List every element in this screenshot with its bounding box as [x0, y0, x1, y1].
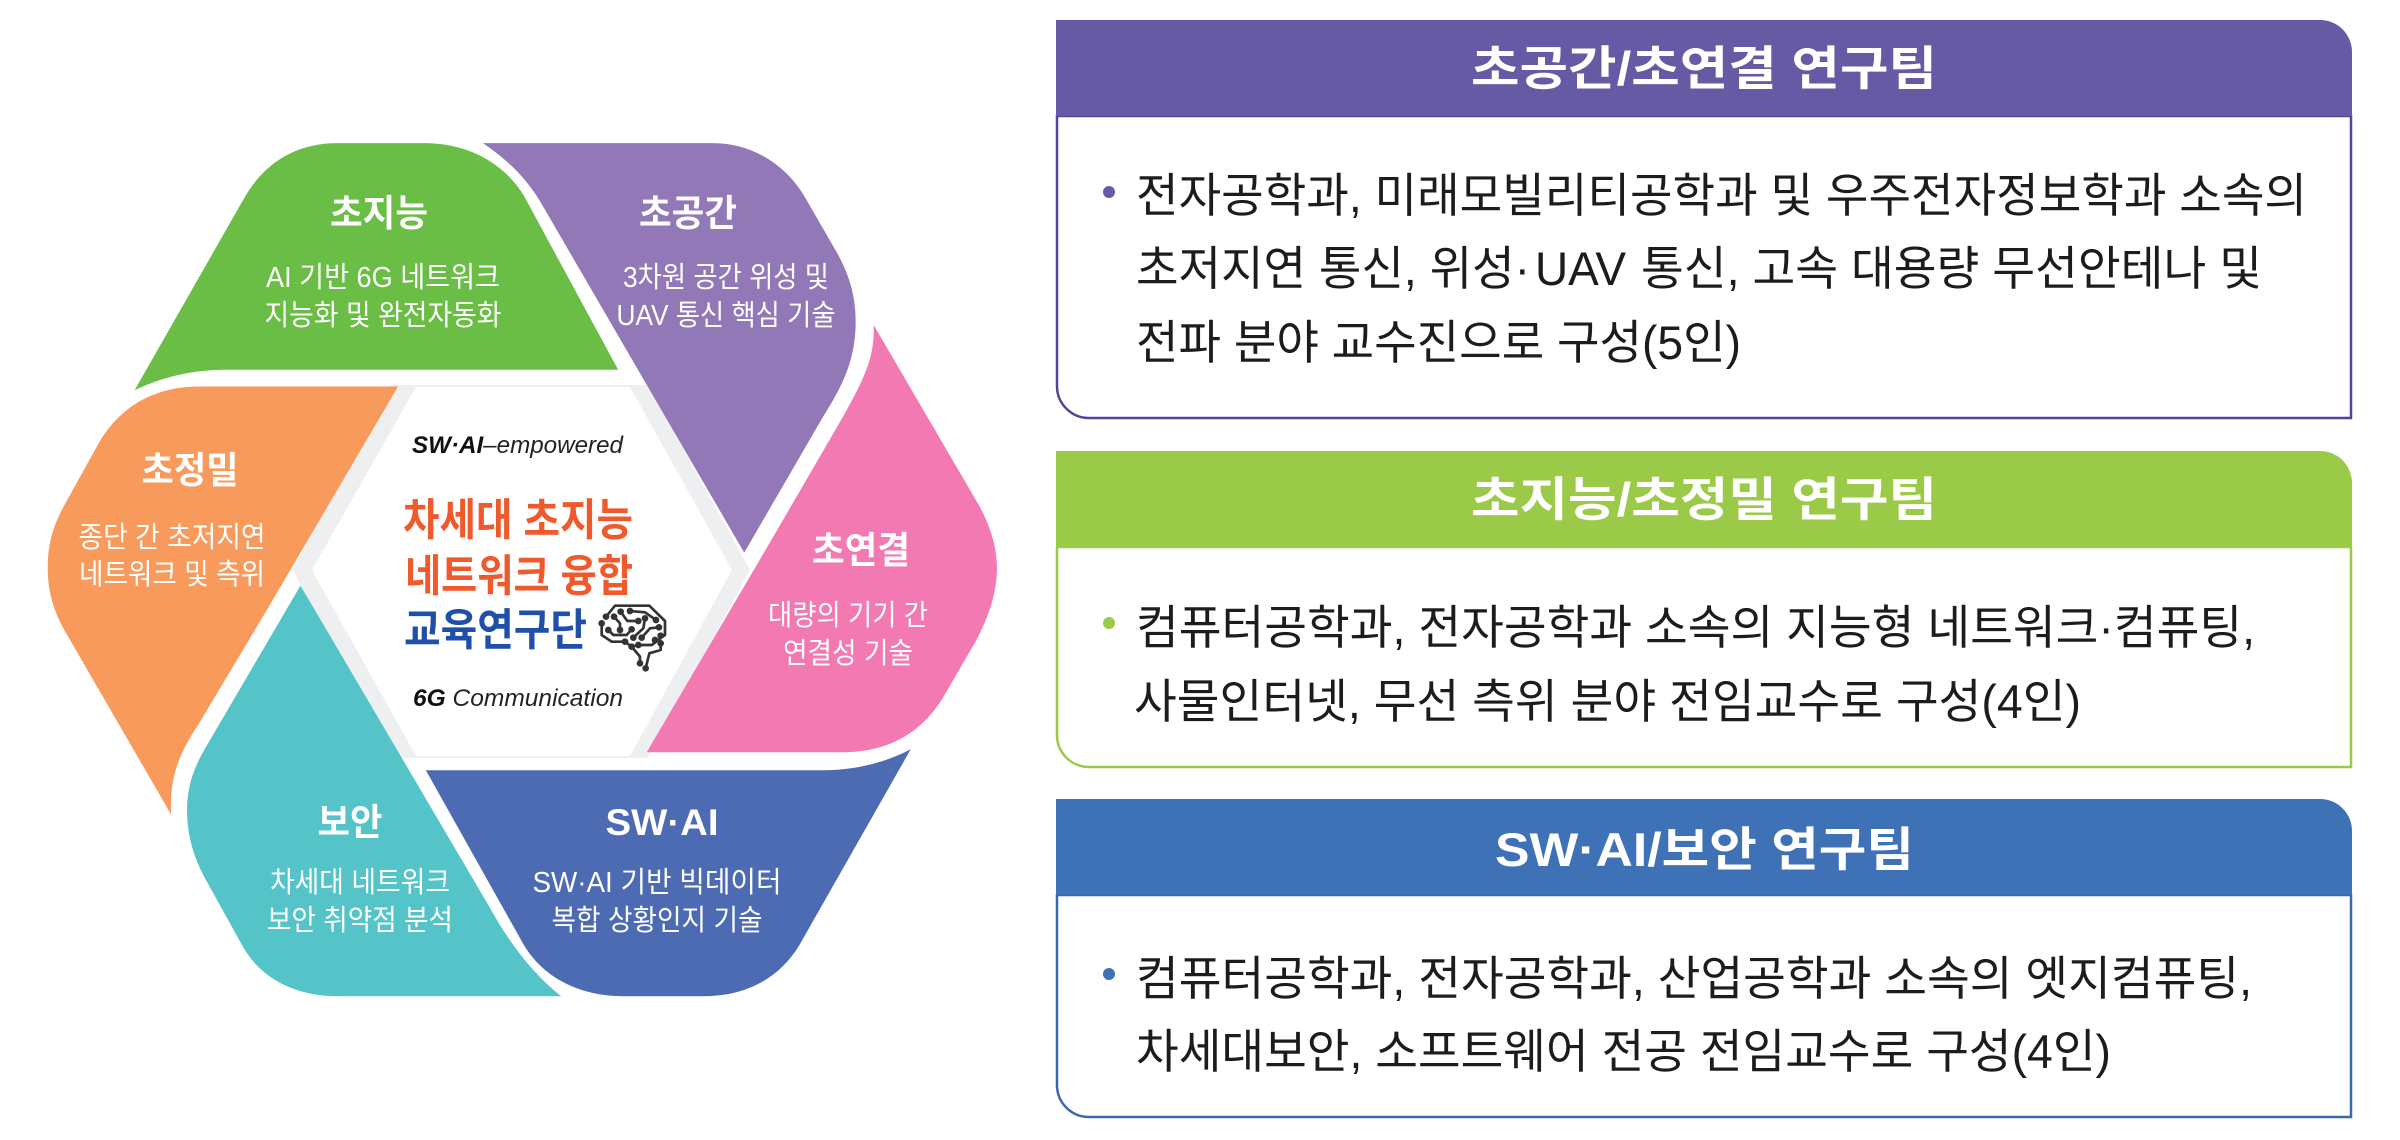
body text: 전자공학과, 미래모빌리티공학과 및 우주전자정보학과 소속의 — [1136, 169, 2307, 222]
body text — [1134, 601, 2255, 728]
body text — [1136, 952, 2252, 1078]
body text: 컴퓨터공학과, 전자공학과, 산업공학과 소속의 엣지컴퓨팅, — [1136, 952, 2252, 1005]
center hexagon halo — [293, 385, 750, 758]
icon: circuit brain — [598, 606, 665, 672]
body text: 전파 분야 교수진으로 구성(5인) — [1136, 316, 1741, 369]
segment: 보안 — [187, 586, 561, 996]
hexagon diagram — [48, 143, 997, 996]
bullet — [1103, 968, 1115, 980]
segment: 초공간 — [483, 143, 856, 553]
body text — [1136, 169, 2307, 369]
panel header — [1056, 799, 2352, 895]
segment: 초정밀: 종단 간 초저지연 — [78, 521, 266, 554]
segment: 초지능: AI 기반 6G 네트워크 — [266, 261, 500, 294]
body text: 사물인터넷, 무선 측위 분야 전임교수로 구성(4인) — [1134, 675, 2081, 728]
segment: SW·AI: SW·AI 기반 빅데이터 — [532, 866, 782, 899]
segment: 보안: 차세대 네트워크 — [270, 866, 450, 899]
center label: SW·AI-empowered: SW·AI–empowered — [412, 432, 624, 459]
body text: 통신, 고속 대용량 무선안테나 및 — [1641, 242, 2262, 295]
segment: 초공간: UAV 통신 핵심 기술 — [616, 300, 836, 332]
segment: 보안: 보안 — [318, 802, 382, 843]
segment: 초연결: 대량의 기기 간 — [768, 599, 928, 632]
body text: 초저지연 통신, 위성· — [1136, 242, 1530, 295]
segment: 보안: 보안 취약점 분석 — [267, 904, 453, 937]
segment: 초지능: 지능화 및 완전자동화 — [264, 300, 502, 332]
segment: 초공간: 3차원 공간 위성 및 — [623, 261, 829, 294]
heading: SW·AI/보안 연구팀 — [1495, 823, 1914, 876]
center title: 네트워크 융합 — [405, 552, 633, 601]
body text: UAV — [1535, 242, 1627, 295]
center hexagon — [312, 387, 732, 756]
panel header — [1056, 20, 2352, 116]
panel header — [1056, 451, 2352, 547]
bullet — [1103, 617, 1115, 629]
segment: SW·AI: SW·AI — [606, 802, 718, 843]
panel: 초지능/초정밀 연구팀 — [1056, 451, 2352, 767]
segment: SW·AI: 복합 상황인지 기술 — [552, 904, 762, 937]
bullet — [1103, 186, 1115, 198]
center title: 교육연구단 — [404, 606, 587, 655]
segment: SW·AI — [426, 749, 911, 996]
segment: 초지능: 초지능 — [330, 193, 428, 234]
heading: 초지능/초정밀 연구팀 — [1471, 473, 1937, 526]
center label: 6G Communication: 6G Communication — [413, 685, 623, 712]
segment: 초정밀: 초정밀 — [142, 450, 238, 491]
segment: 초공간: 초공간 — [639, 193, 737, 234]
body text: 차세대보안, 소프트웨어 전공 전임교수로 구성(4인) — [1136, 1025, 2111, 1078]
body text: 컴퓨터공학과, 전자공학과 소속의 지능형 네트워크·컴퓨팅, — [1136, 601, 2255, 654]
segment: 초정밀 — [48, 387, 398, 815]
segment: 초연결: 초연결 — [812, 530, 910, 571]
segment: 초지능 — [135, 143, 618, 390]
segment: 초정밀: 네트워크 및 측위 — [79, 558, 265, 591]
center title: 차세대 초지능 — [403, 496, 633, 545]
segment: 초연결: 연결성 기술 — [783, 638, 913, 670]
segment: 초연결 — [647, 325, 997, 752]
center title — [403, 496, 633, 655]
panel: 초공간/초연결 연구팀 — [1056, 20, 2352, 418]
panel: SW·AI/보안 연구팀 — [1056, 799, 2352, 1117]
heading: 초공간/초연결 연구팀 — [1471, 42, 1937, 95]
